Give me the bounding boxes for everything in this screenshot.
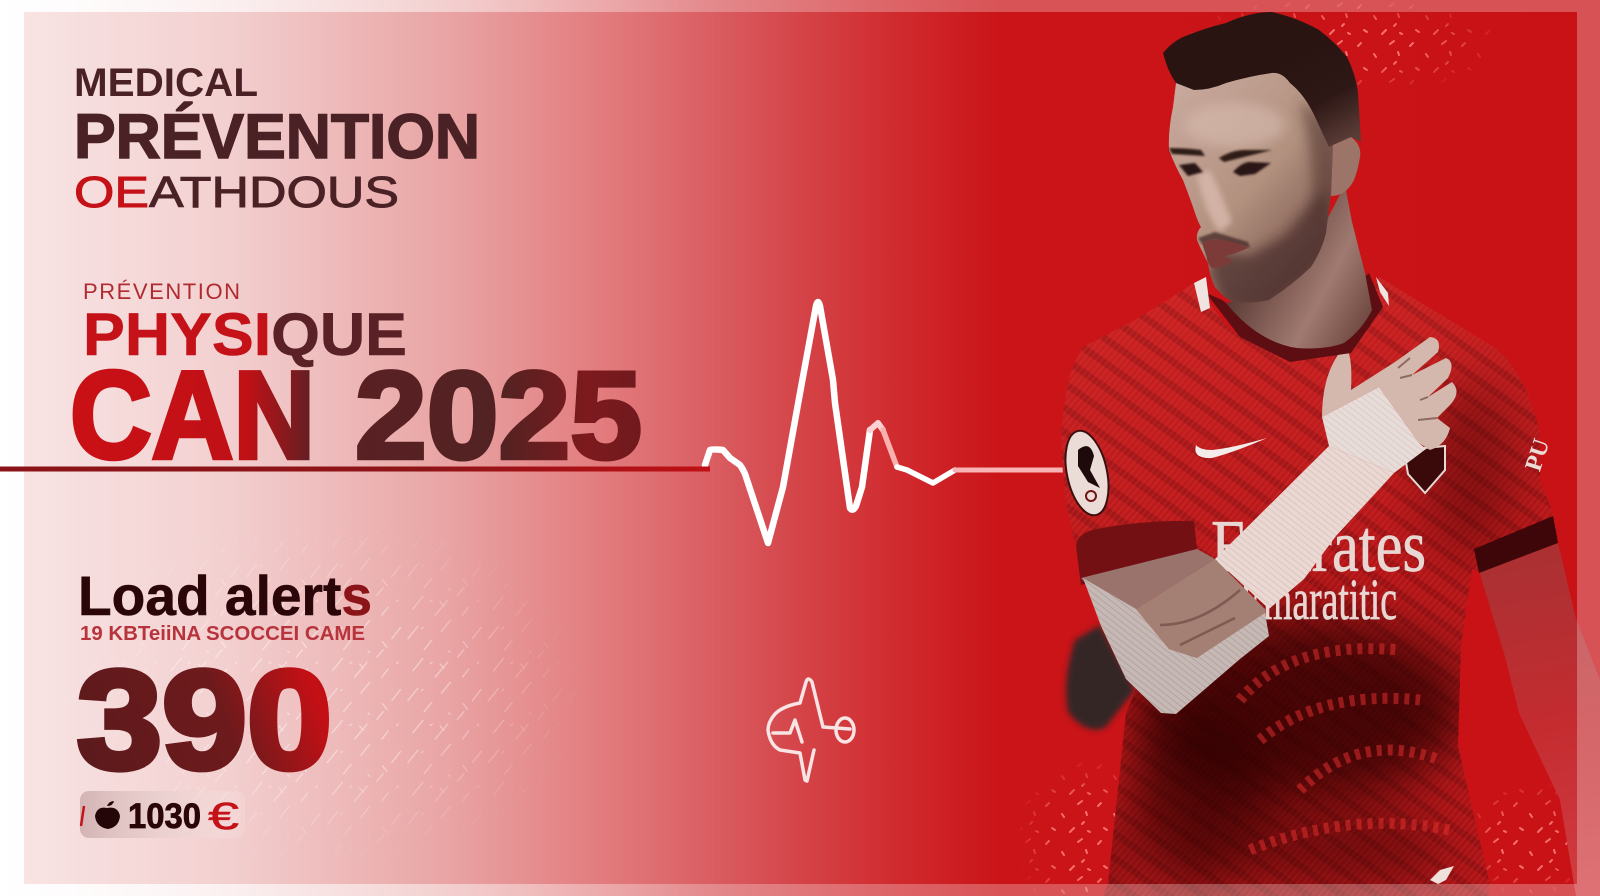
label: prévention: PRÉVENTION bbox=[83, 279, 240, 304]
texture: top-right particles bbox=[1191, 2, 1490, 85]
upper arm bbox=[1081, 549, 1215, 609]
heading: physique: PHYSIQUE bbox=[83, 301, 407, 368]
price value: 1030 bbox=[128, 797, 201, 836]
left sleeve crest bbox=[1058, 427, 1116, 519]
lips bbox=[1202, 239, 1248, 268]
ear bbox=[1331, 136, 1360, 196]
texture: lower-left particles bbox=[1020, 762, 1117, 894]
euro sign: € bbox=[208, 796, 239, 838]
right sleeve hem bbox=[1474, 516, 1558, 573]
sponsor text bbox=[1211, 506, 1426, 632]
hand bbox=[1322, 337, 1457, 450]
title block: medical prévention bbox=[74, 61, 480, 217]
left sleeve hem bbox=[1076, 521, 1197, 585]
sponsor text: Emirates bbox=[1211, 506, 1426, 588]
neck bbox=[1226, 185, 1372, 348]
player figure bbox=[1040, 12, 1600, 896]
forearm bandage bbox=[1215, 446, 1394, 609]
right arm bbox=[1479, 543, 1600, 896]
icon: heart with pulse bbox=[768, 679, 854, 781]
eyebrows bbox=[1169, 148, 1272, 162]
heading: medical: MEDICAL bbox=[74, 61, 258, 105]
hair bbox=[1163, 12, 1361, 147]
forearm bbox=[1136, 559, 1267, 658]
moustache bbox=[1198, 232, 1250, 248]
heading: CAN: CAN bbox=[70, 347, 315, 485]
slash mark bbox=[81, 806, 84, 826]
texture: lower-right particles bbox=[1477, 786, 1570, 894]
heading: prévention: PRÉVENTION bbox=[74, 102, 480, 172]
eyes bbox=[1179, 162, 1271, 176]
sponsor text: Emaratitic bbox=[1240, 567, 1397, 632]
divider line connecting to ECG bbox=[0, 466, 710, 472]
facial shading bbox=[1185, 100, 1340, 310]
hand bandage bbox=[1322, 387, 1426, 473]
heading: subtitle: OE ATHDOUS bbox=[74, 168, 399, 217]
collar white trims bbox=[1194, 277, 1389, 312]
texture: pale dashes behind load alerts bbox=[138, 540, 562, 838]
stat block: load alerts bbox=[77, 564, 372, 838]
sleeve sponsor: PU bbox=[1521, 436, 1555, 474]
icon: apple bbox=[95, 801, 120, 829]
heading block: prévention physique CAN 2025 bbox=[70, 279, 642, 485]
big number: 390 bbox=[77, 641, 332, 798]
swoosh logo bbox=[1195, 438, 1267, 458]
face bbox=[1169, 70, 1333, 303]
elbow bandage bbox=[1083, 578, 1269, 714]
price pill bbox=[80, 791, 245, 838]
shirt bbox=[1040, 270, 1580, 896]
right crest bbox=[1404, 446, 1445, 493]
heading: load alerts: Load alerts bbox=[78, 564, 372, 627]
pill background bbox=[80, 791, 245, 838]
small hem logo bbox=[1430, 866, 1454, 884]
ECG heartbeat line bbox=[705, 302, 1067, 543]
sub label: 19 KBTeiiNA SCOCCEI CAME bbox=[80, 623, 365, 645]
dark shadow behind elbow bbox=[1066, 625, 1135, 730]
collar bbox=[1206, 273, 1383, 362]
heading: 2025: 2025 bbox=[355, 347, 642, 485]
